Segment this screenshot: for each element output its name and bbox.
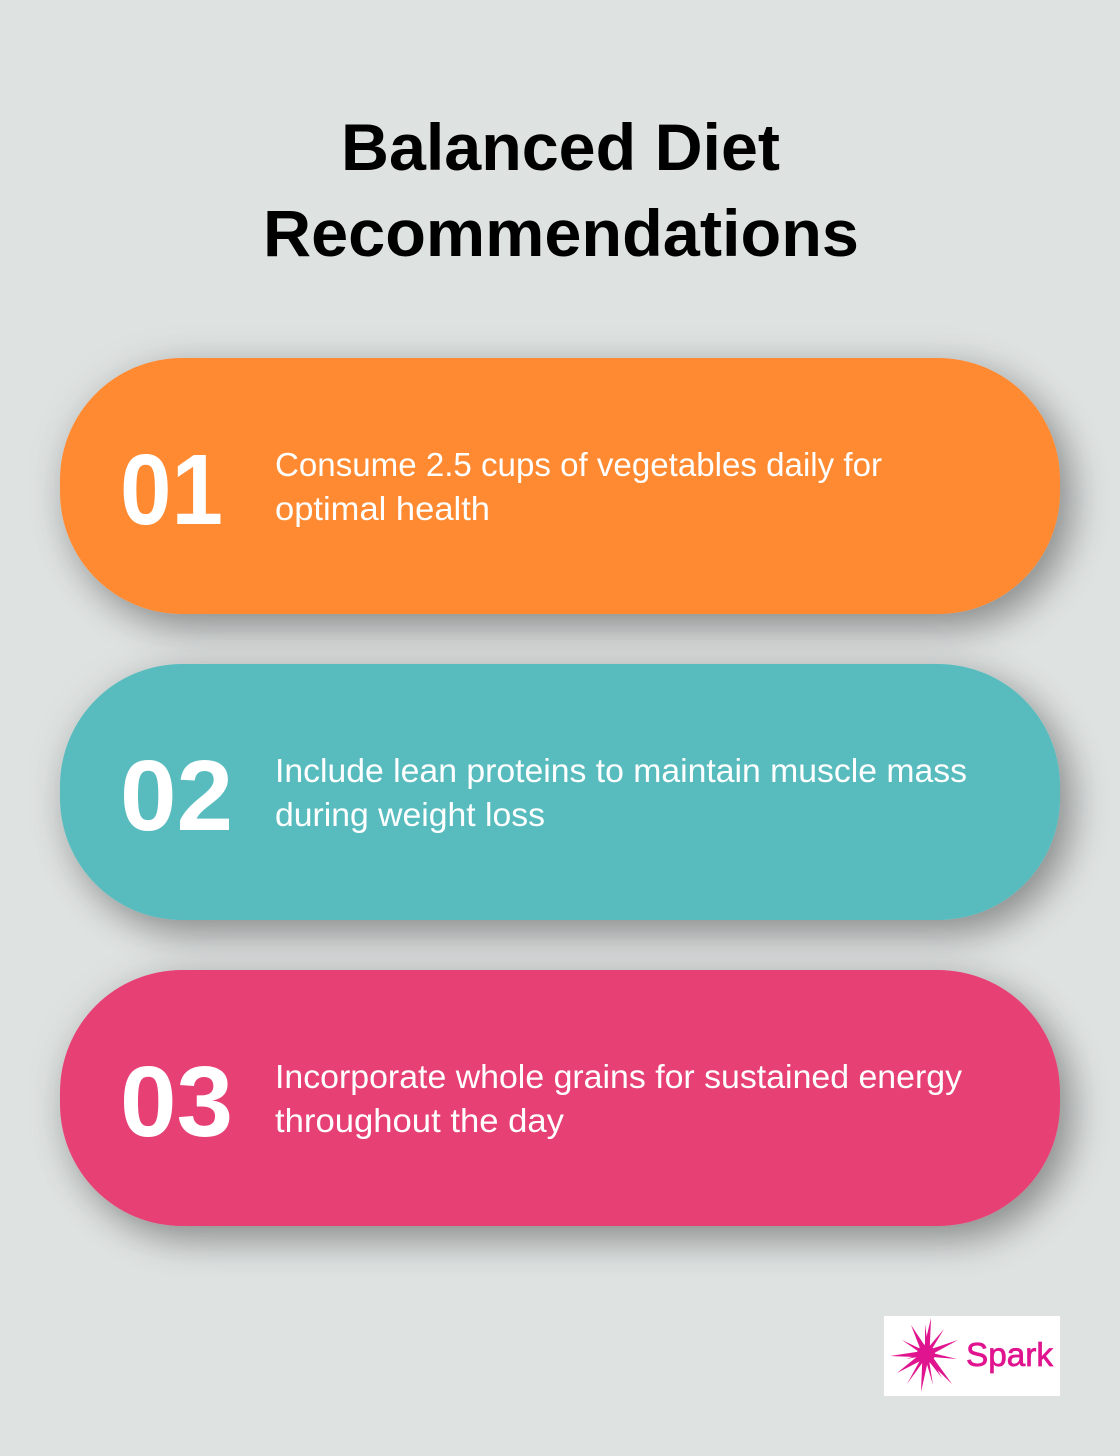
number 03: 03 <box>120 1046 233 1158</box>
panel: step 03 <box>60 970 1060 1226</box>
logo wordmark: Spark <box>966 1336 1053 1373</box>
text: vegetables: optimal health <box>275 490 490 527</box>
icon: starburst <box>890 1318 958 1392</box>
title: Recommendations <box>263 196 859 270</box>
text: vegetables <box>275 446 882 527</box>
number 02: 02 <box>120 740 233 852</box>
panel: step 01 <box>60 358 1060 614</box>
text: whole grains <box>275 1058 963 1139</box>
text: proteins: during weight loss <box>275 796 545 833</box>
number 01: 01 <box>120 434 223 546</box>
text: whole grains: throughout the day <box>275 1102 565 1139</box>
panel: step 02 <box>60 664 1060 920</box>
text: whole grains: Incorporate whole grains for sustained energy <box>275 1058 963 1095</box>
logo: Spark <box>884 1316 1060 1396</box>
title <box>263 110 859 270</box>
title: Balanced Diet <box>341 110 780 184</box>
text: vegetables: Consume 2.5 cups of vegetables daily for <box>275 446 882 483</box>
text: proteins: Include lean proteins to maintain muscle mass <box>275 752 967 789</box>
text: proteins <box>275 752 967 833</box>
